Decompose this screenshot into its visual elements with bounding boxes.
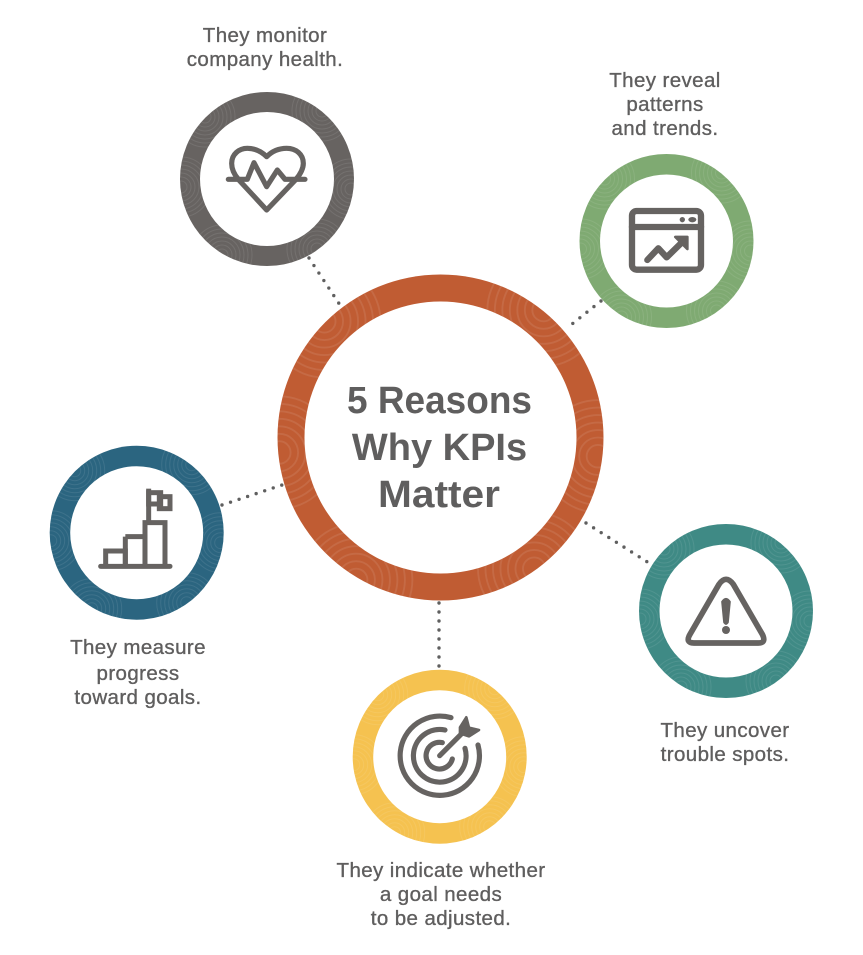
label: uncover trouble: They uncover [660,719,790,742]
connector: health to center [309,258,340,305]
node: goal adjustment [336,670,545,930]
icon: browser with rising chart [632,211,701,270]
node: company health [180,26,354,266]
label: reveal patterns: and trends. [612,117,718,140]
node: patterns and trends [580,72,754,328]
title: Why KPIs [352,427,527,469]
node: trouble spots [639,524,813,766]
icon: target with arrow [400,716,479,795]
label: monitor health: They monitor [203,24,327,47]
ring: blue [50,446,224,620]
ring: gray [180,92,354,266]
label: reveal patterns: They reveal [609,69,721,92]
label: measure progress [70,636,206,709]
connector: progress to center [222,484,285,505]
icon: heart with pulse [228,148,305,210]
label: reveal patterns [609,69,721,140]
label: measure progress: They measure [70,636,206,659]
icon: warning triangle [688,579,764,643]
ring: yellow [352,670,527,844]
icon: stair bars with flag [101,489,170,566]
label: uncover trouble [660,719,790,766]
label: monitor health: company health. [187,48,343,71]
label: indicate goal [337,859,545,930]
label: indicate goal: to be adjusted. [371,907,511,930]
label: indicate goal: a goal needs [380,883,502,906]
label: uncover trouble: trouble spots. [661,743,789,766]
node: progress [50,446,224,708]
title [347,380,532,516]
label: measure progress: progress [97,662,179,685]
connector: trouble spots to center [586,523,649,563]
title: Matter [378,474,500,516]
connector: trends to center [567,301,601,328]
center ring with title [278,274,604,600]
title: 5 Reasons [347,380,532,422]
label: measure progress: toward goals. [74,686,202,709]
connector: goal to center [437,603,441,668]
label: monitor health [187,24,343,71]
label: indicate goal: They indicate whether [337,859,545,882]
ring: green [580,154,754,328]
ring: teal [639,524,813,698]
label: reveal patterns: patterns [626,93,704,116]
